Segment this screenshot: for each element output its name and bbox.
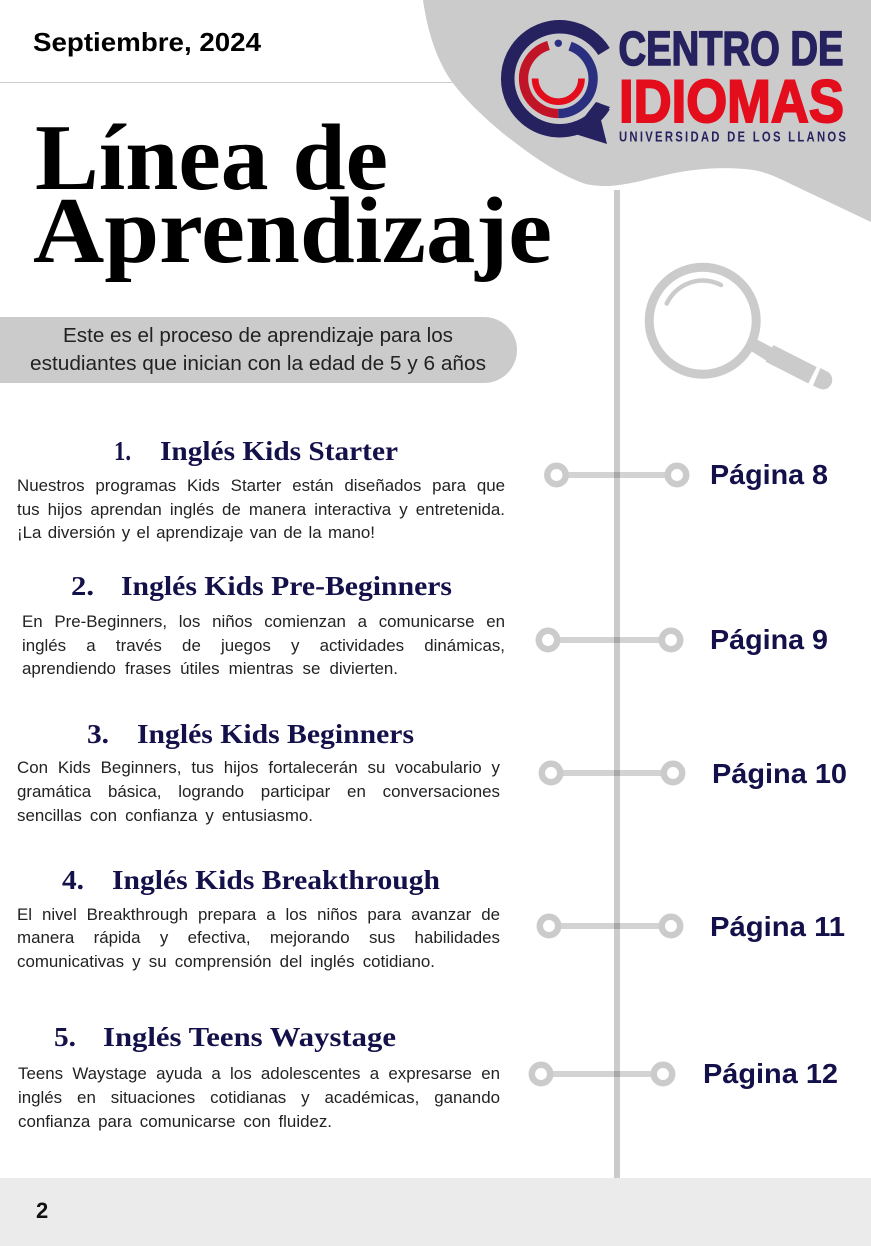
- connector: page 8: Página 8: [710, 459, 828, 490]
- step 3 heading: Inglés Kids Beginners: [137, 719, 414, 749]
- step 5: Inglés Teens Waystage: Teens Waystage ayuda a los adolescentes a expresarse en: [18, 1064, 500, 1083]
- step 1: Inglés Kids Starter: tus hijos aprendan inglés de manera interactiva y entretenida.: [17, 500, 505, 519]
- step 4: Inglés Kids Breakthrough: manera rápida y efectiva, mejorando sus habilidades: [17, 928, 500, 947]
- step 3: Inglés Kids Beginners: [17, 719, 500, 825]
- step 2: Inglés Kids Pre-Beginners: En Pre-Beginners, los niños comienzan a comunicarse en: [22, 612, 505, 631]
- step 1 heading: 1.: [114, 436, 131, 466]
- timeline vertical bar: [614, 190, 620, 1178]
- logo text: [618, 23, 846, 145]
- step 5 heading: Inglés Teens Waystage: [103, 1022, 396, 1052]
- icon: magnifying glass: [649, 267, 832, 389]
- date: Septiembre, 2024: [33, 27, 262, 57]
- connector: page 10: [542, 758, 847, 789]
- intro pill background: [0, 317, 517, 383]
- step 3 heading: 3.: [87, 719, 109, 749]
- step 2: Inglés Kids Pre-Beginners: aprendiendo frases útiles mientras se divierten.: [22, 659, 398, 678]
- step 3: Inglés Kids Beginners: Con Kids Beginners, tus hijos fortalecerán su vocabulario y: [17, 758, 500, 777]
- step 4: Inglés Kids Breakthrough: El nivel Breakthrough prepara a los niños para avanzar de: [17, 905, 500, 924]
- step 3 description: [17, 758, 500, 825]
- step 5 heading: 5.: [54, 1022, 76, 1052]
- step 5 description: [18, 1064, 500, 1131]
- step 5: Inglés Teens Waystage: confianza para comunicarse con fluidez.: [18, 1112, 332, 1131]
- intro text: Este es el proceso de aprendizaje para los: [63, 325, 453, 347]
- step 2: Inglés Kids Pre-Beginners: inglés a través de juegos y actividades dinámicas,: [22, 636, 505, 655]
- step 2: Inglés Kids Pre-Beginners: [22, 571, 505, 678]
- step 4 heading: 4.: [62, 865, 84, 895]
- intro text: [30, 325, 486, 375]
- step 3: Inglés Kids Beginners: sencillas con confianza y entusiasmo.: [17, 806, 313, 825]
- step 1 heading: Inglés Kids Starter: [160, 436, 398, 466]
- step 4 description: [17, 905, 500, 971]
- step 1: Inglés Kids Starter: Nuestros programas Kids Starter están diseñados para que: [17, 476, 505, 495]
- footer band: [0, 1178, 871, 1246]
- connector: page 11: Página 11: [710, 911, 845, 942]
- step 4 heading: Inglés Kids Breakthrough: [112, 865, 440, 895]
- logo emblem: [508, 27, 610, 144]
- step 1: Inglés Kids Starter: ¡La diversión y el aprendizaje van de la mano!: [17, 523, 375, 542]
- intro text: estudiantes que inician con la edad de 5 y 6 años: [30, 353, 486, 375]
- step 2 description: [22, 612, 505, 678]
- title: Aprendizaje: [33, 179, 552, 283]
- corner blob: [423, 0, 871, 222]
- step 5: Inglés Teens Waystage: inglés en situaciones cotidianas y académicas, ganando: [18, 1088, 500, 1107]
- step 2 heading: 2.: [71, 571, 94, 601]
- step 4: Inglés Kids Breakthrough: comunicativas y su comprensión del inglés cotidiano.: [17, 952, 435, 971]
- step 3: Inglés Kids Beginners: gramática básica, logrando participar en conversaciones: [17, 782, 500, 801]
- connector: page 10: Página 10: [712, 758, 847, 789]
- connector: page 12: [532, 1058, 838, 1089]
- step 1 description: [17, 476, 505, 542]
- page number: 2: [36, 1198, 48, 1223]
- connector: page 8: [547, 459, 828, 490]
- step 1: Inglés Kids Starter: [17, 436, 505, 542]
- logo text: UNIVERSIDAD DE LOS LLANOS: [619, 128, 846, 145]
- step 4: Inglés Kids Breakthrough: [17, 865, 500, 971]
- connector: page 12: Página 12: [703, 1058, 838, 1089]
- step 2 heading: Inglés Kids Pre-Beginners: [121, 571, 452, 601]
- title: Línea de: [35, 106, 388, 210]
- top divider: [0, 82, 452, 83]
- connector: page 9: Página 9: [710, 624, 828, 655]
- logo: Centro de Idiomas: [508, 23, 846, 145]
- step 5: Inglés Teens Waystage: [18, 1022, 500, 1131]
- connector: page 9: [539, 624, 828, 655]
- logo text: IDIOMAS: [619, 68, 844, 135]
- connector: page 11: [540, 911, 845, 942]
- title: [33, 106, 552, 283]
